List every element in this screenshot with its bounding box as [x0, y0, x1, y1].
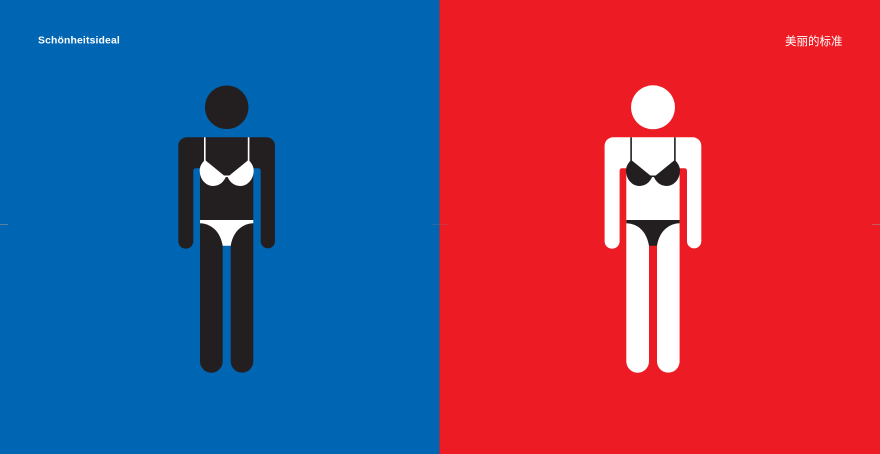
bikini bottom [200, 220, 253, 246]
heading: 美丽的标准: 美丽的标准 [785, 34, 842, 48]
panel: blue German side [0, 0, 440, 454]
bikini bottom [626, 220, 680, 246]
heading: Schönheitsideal: Schönheitsideal [38, 35, 120, 46]
figure: black woman with white bikini [178, 86, 275, 373]
figure head [205, 86, 248, 129]
figure body [178, 137, 275, 373]
figure body [605, 137, 701, 373]
figure: white woman with black bikini [605, 85, 701, 373]
bra [200, 137, 254, 186]
figure head [631, 85, 675, 129]
bra [626, 137, 680, 186]
panel: red Chinese side [440, 0, 880, 454]
